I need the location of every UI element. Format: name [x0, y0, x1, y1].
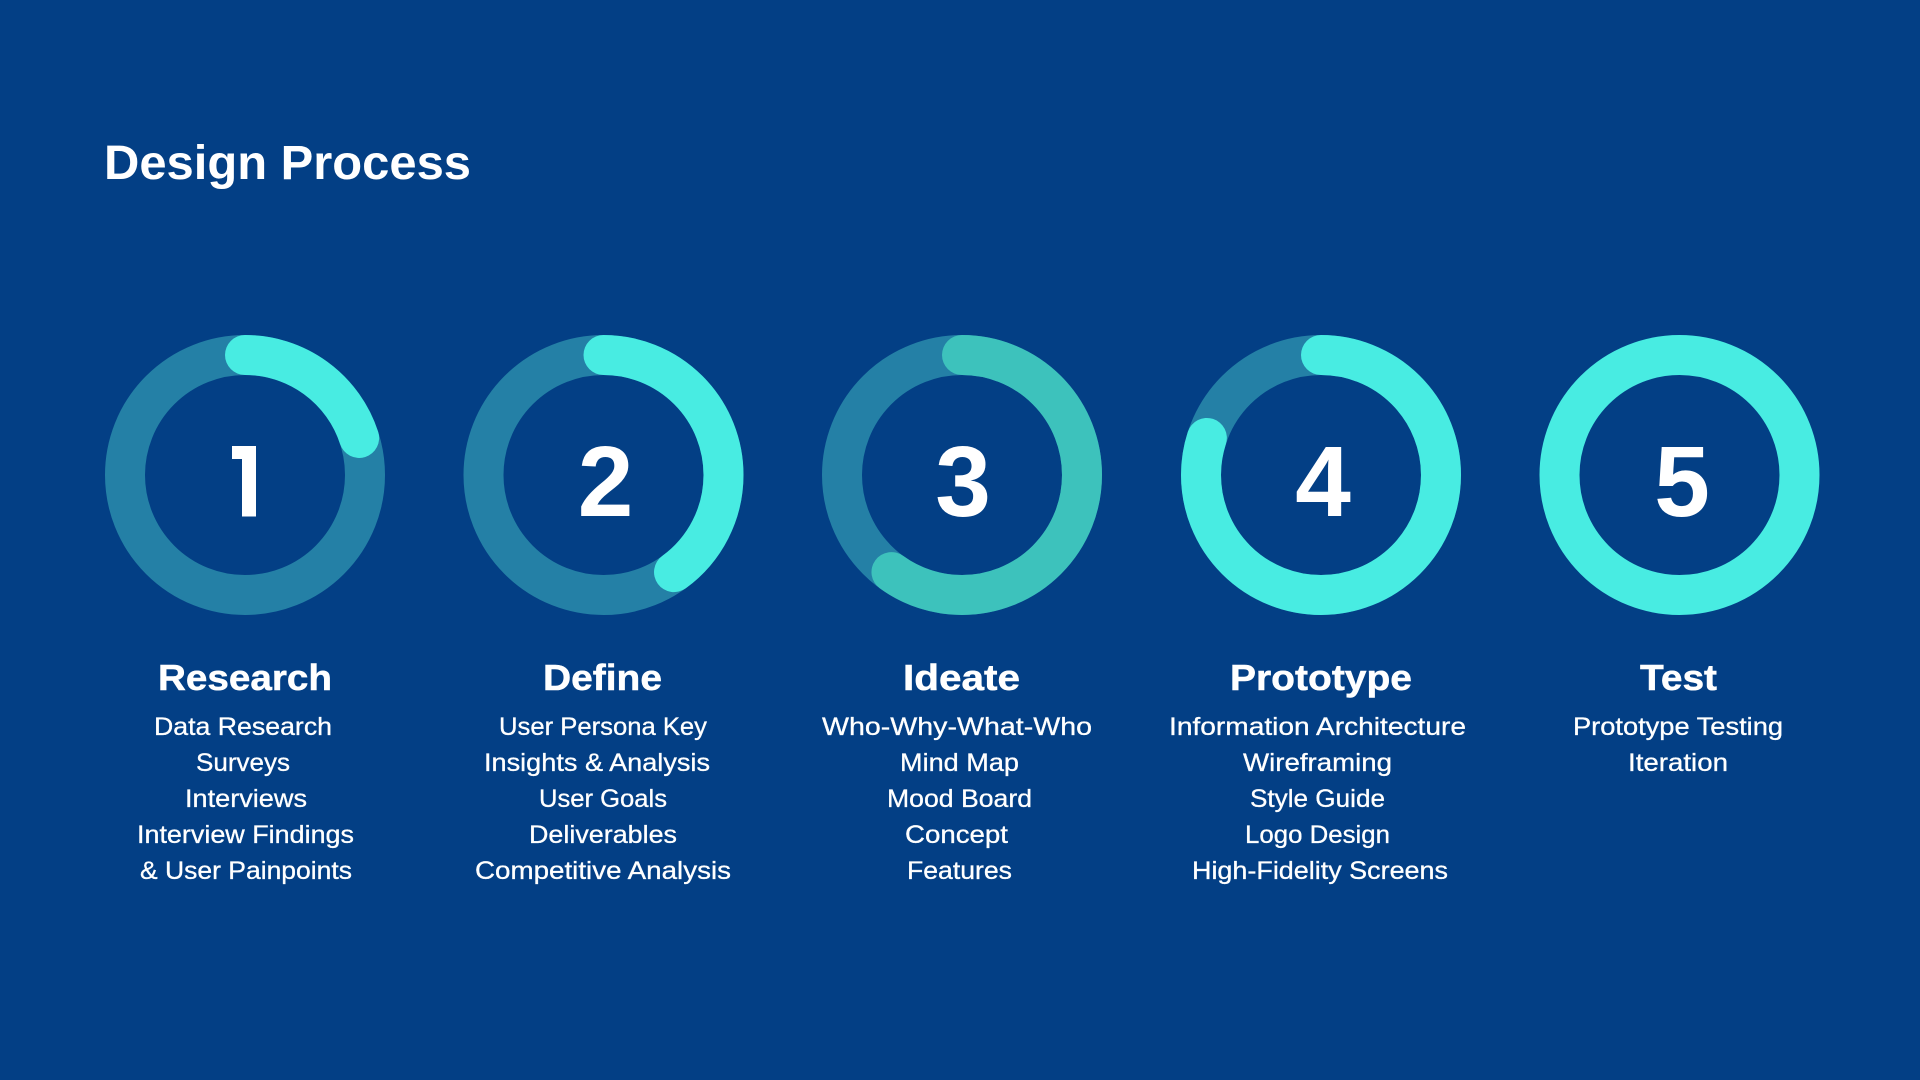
list: prototype items: High-Fidelity Screens	[1192, 857, 1448, 885]
list: ideate items	[822, 713, 1092, 885]
list: research items: & User Painpoints	[140, 857, 352, 885]
progress ring 1 (20%)	[125, 355, 365, 595]
list: research items: Interviews	[185, 785, 307, 813]
list: ideate items: Who-Why-What-Who	[822, 713, 1092, 741]
number 4: 4	[1295, 426, 1351, 538]
list: prototype items	[1169, 713, 1466, 885]
list: ideate items: Mood Board	[887, 785, 1032, 813]
heading: Ideate: Ideate	[903, 657, 1020, 698]
list: define items: Deliverables	[529, 821, 677, 849]
infographic canvas	[105, 144, 1820, 884]
heading: Define: Define	[543, 657, 662, 698]
list: define items	[475, 713, 731, 885]
list: prototype items: Wireframing	[1243, 749, 1392, 777]
list: test items: Prototype Testing	[1573, 713, 1783, 741]
progress ring 3 (60%)	[842, 355, 1082, 595]
list: prototype items: Information Architecture	[1169, 713, 1466, 741]
list: prototype items: Style Guide	[1250, 785, 1385, 813]
number 3: 3	[935, 426, 991, 538]
progress ring 5 (100%)	[1560, 355, 1800, 595]
list: research items: Surveys	[196, 749, 290, 777]
number 1	[232, 446, 256, 516]
list: research items: Data Research	[154, 713, 332, 741]
list: define items: Insights & Analysis	[484, 749, 710, 777]
number 2: 2	[578, 426, 633, 538]
list: ideate items: Mind Map	[900, 749, 1019, 777]
number 1: 1	[220, 426, 276, 538]
heading: Prototype: Prototype	[1230, 657, 1412, 698]
panel: step 3 ideate	[822, 355, 1092, 885]
title: Design Process	[104, 137, 471, 190]
list: test items	[1573, 713, 1783, 777]
progress ring 4 (80%)	[1201, 355, 1441, 595]
list: ideate items: Concept	[905, 821, 1008, 849]
heading: Research: Research	[158, 657, 332, 698]
list: define items: User Persona Key	[499, 713, 708, 741]
heading: Test: Test	[1640, 657, 1717, 698]
list: prototype items: Logo Design	[1245, 821, 1390, 849]
panel: step 1 research	[125, 355, 365, 885]
list: define items: User Goals	[539, 785, 667, 813]
list: ideate items: Features	[907, 857, 1012, 885]
list: test items: Iteration	[1628, 749, 1728, 777]
list: research items	[137, 713, 354, 885]
list: research items: Interview Findings	[137, 821, 354, 849]
panel: step 4 prototype	[1169, 355, 1466, 885]
progress ring 2 (40%)	[484, 355, 724, 595]
list: define items: Competitive Analysis	[475, 857, 731, 885]
number 5: 5	[1654, 426, 1710, 538]
panel: step 5 test	[1560, 355, 1800, 777]
panel: step 2 define	[475, 355, 731, 885]
